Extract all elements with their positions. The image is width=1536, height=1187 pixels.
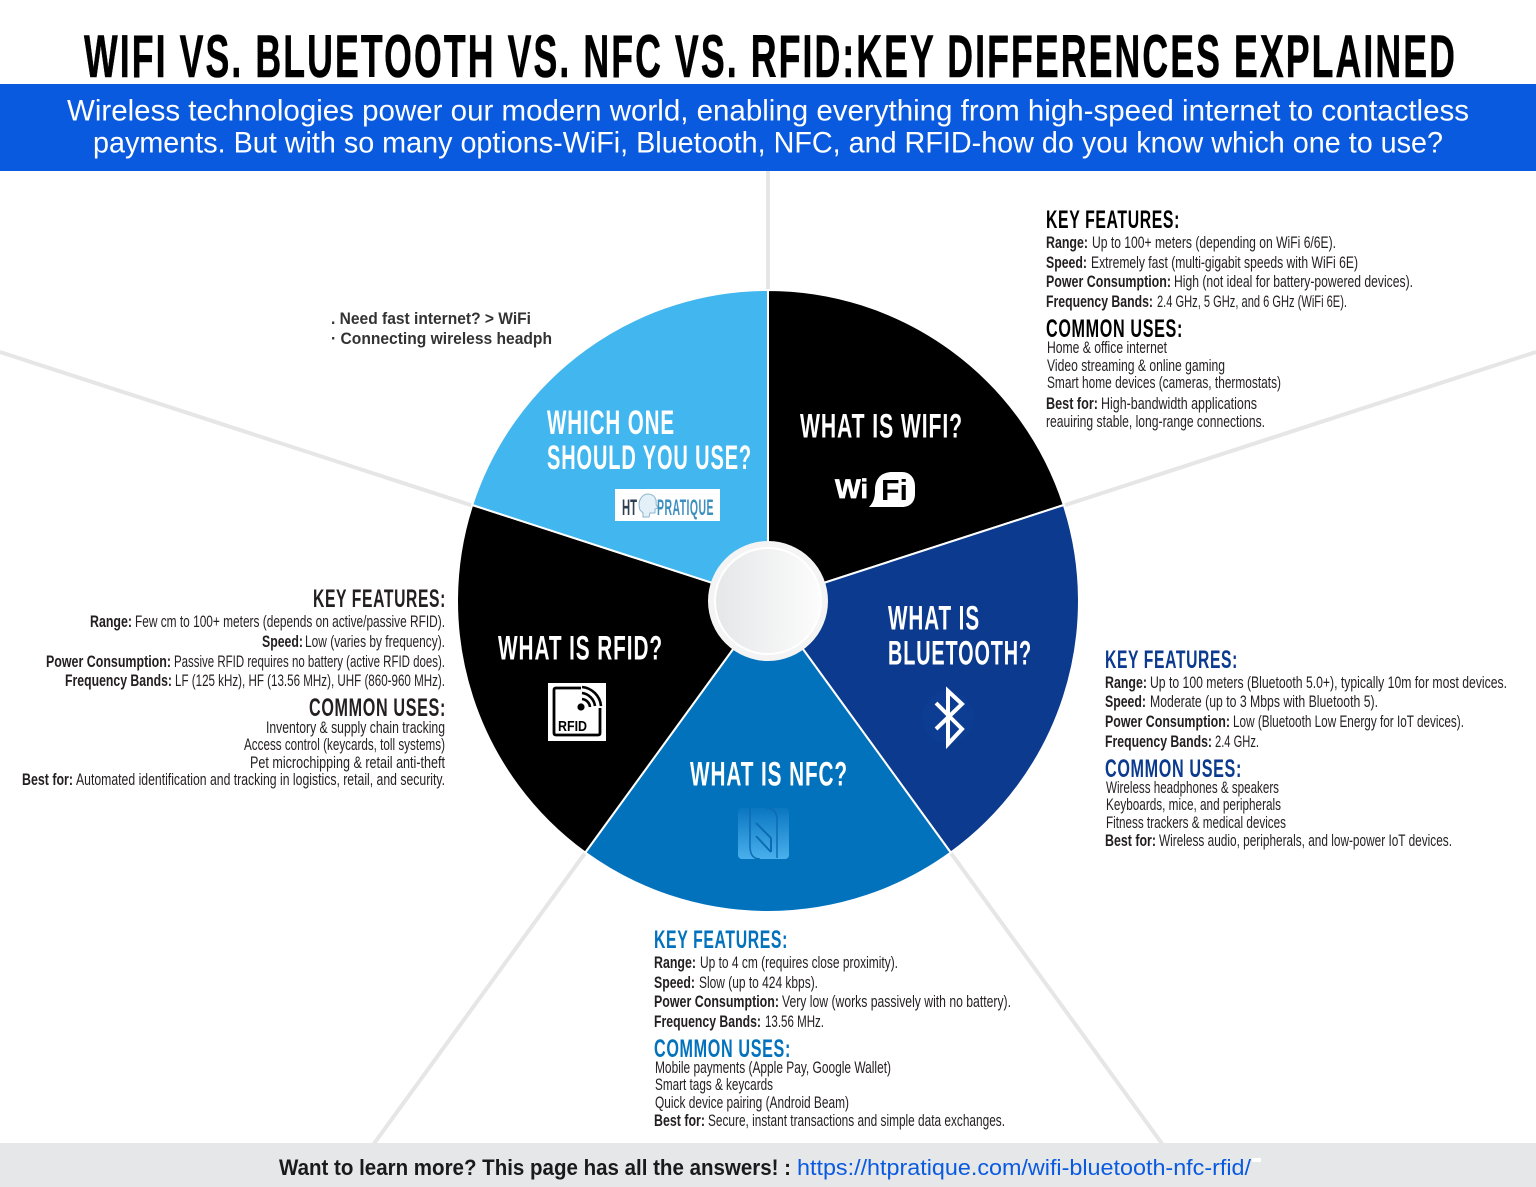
panel: wifi details: Video streaming & online gaming: [1047, 357, 1225, 375]
panel: wifi details: KEY FEATURES:: [1046, 206, 1180, 234]
wedge: rfid: [457, 505, 768, 853]
panel: nfc details: Quick device pairing (Android Beam): [655, 1094, 849, 1112]
text block: which one tips: [331, 310, 552, 348]
panel: rfid details: Range:: [90, 613, 132, 631]
panel: nfc details: Very low (works passively with no battery).: [782, 993, 1011, 1011]
subtitle banner: [0, 84, 1536, 171]
panel: bluetooth details: KEY FEATURES:: [1105, 646, 1238, 674]
icon: wifi logo: [835, 472, 915, 507]
footer bar: https://htpratique.com/wifi-bluetooth-nfc-rfid/: [797, 1155, 1252, 1180]
heading: what is wifi: WHAT IS WIFI?: [800, 408, 963, 446]
icon: wifi logo: Fi: [881, 475, 908, 507]
panel: rfid details: Automated identification and tracking in logistics, retail, and security.: [76, 771, 445, 789]
panel: rfid details: LF (125 kHz), HF (13.56 MHz), UHF (860-960 MHz).: [175, 672, 445, 690]
panel: wifi details: Smart home devices (cameras, thermostats): [1047, 374, 1281, 392]
text block: which one tips: . Need fast internet? > WiFi: [331, 310, 531, 328]
panel: bluetooth details: Range:: [1105, 674, 1147, 692]
panel: nfc details: Frequency Bands:: [654, 1013, 761, 1031]
panel: bluetooth details: Wireless headphones & speakers: [1106, 779, 1279, 797]
panel: bluetooth details: Speed:: [1105, 693, 1146, 711]
pie wheel: [457, 290, 1079, 912]
panel: nfc details: 13.56 MHz.: [765, 1013, 824, 1031]
panel: bluetooth details: Power Consumption:: [1105, 713, 1230, 731]
panel: wifi details: Range:: [1046, 234, 1088, 252]
panel: wifi details: 2.4 GHz, 5 GHz, and 6 GHz (WiFi 6E).: [1157, 293, 1347, 311]
panel: nfc details: Mobile payments (Apple Pay, Google Wallet): [655, 1059, 891, 1077]
panel: nfc details: Best for:: [654, 1112, 705, 1130]
logo: htpratique: HT: [622, 495, 637, 520]
panel: wifi details: Extremely fast (multi-gigabit speeds with WiFi 6E): [1091, 254, 1358, 272]
panel: wifi details: Home & office internet: [1047, 339, 1167, 357]
logo: htpratique: PRATIQUE: [657, 495, 714, 520]
icon: rfid: RFID: [558, 718, 587, 735]
panel: bluetooth details: Frequency Bands:: [1105, 733, 1212, 751]
panel: rfid details: Inventory & supply chain tracking: [266, 719, 445, 737]
heading: what is bluetooth: WHAT IS: [888, 600, 980, 638]
panel: nfc details: Speed:: [654, 974, 695, 992]
panel: rfid details: Power Consumption:: [46, 653, 171, 671]
panel: rfid details: Few cm to 100+ meters (depends on active/passive RFID).: [135, 613, 445, 631]
center hub: [708, 541, 828, 661]
wedge: nfc: [585, 601, 951, 912]
icon: nfc: [738, 808, 789, 859]
panel: rfid details: Frequency Bands:: [65, 672, 172, 690]
panel: rfid details: KEY FEATURES:: [313, 585, 446, 613]
panel: wifi details: High (not ideal for battery-powered devices).: [1174, 273, 1413, 291]
heading: what is bluetooth: [888, 600, 1032, 672]
panel: wifi details: Frequency Bands:: [1046, 293, 1153, 311]
subtitle banner: payments. But with so many options-WiFi, Bluetooth, NFC, and RFID-how do you know which one to use?: [93, 126, 1443, 160]
panel: nfc details: [654, 926, 1011, 1130]
panel: rfid details: Pet microchipping & retail anti-theft: [250, 754, 445, 772]
footer bar: Want to learn more? This page has all the answers! :: [279, 1155, 791, 1180]
icon: rfid: [548, 683, 606, 741]
panel: wifi details: Power Consumption:: [1046, 273, 1171, 291]
heading: what is rfid: WHAT IS RFID?: [498, 630, 663, 668]
panel: rfid details: Speed:: [262, 633, 303, 651]
panel: nfc details: Up to 4 cm (requires close proximity).: [700, 954, 898, 972]
wedge: bluetooth: [768, 505, 1079, 853]
subtitle banner: Wireless technologies power our modern world, enabling everything from high-speed internet to contactless: [67, 94, 1469, 128]
panel: bluetooth details: Best for:: [1105, 832, 1156, 850]
panel: nfc details: Secure, instant transactions and simple data exchanges.: [708, 1112, 1005, 1130]
heading: what is bluetooth: BLUETOOTH?: [888, 634, 1032, 672]
panel: nfc details: Power Consumption:: [654, 993, 779, 1011]
heading: which one: [547, 404, 752, 477]
panel: rfid details: [22, 585, 446, 789]
footer bar: [0, 1143, 1536, 1187]
panel: bluetooth details: [1105, 646, 1507, 850]
wedge: which one: [472, 290, 768, 601]
panel: wifi details: Up to 100+ meters (depending on WiFi 6/6E).: [1092, 234, 1336, 252]
panel: rfid details: Passive RFID requires no battery (active RFID does).: [174, 653, 445, 671]
logo: htpratique: [615, 489, 720, 521]
panel: rfid details: Access control (keycards, toll systems): [244, 736, 445, 754]
panel: bluetooth details: Moderate (up to 3 Mbps with Bluetooth 5).: [1150, 693, 1378, 711]
panel: wifi details: Speed:: [1046, 254, 1087, 272]
heading: which one: SHOULD YOU USE?: [547, 439, 752, 477]
heading: which one: WHICH ONE: [547, 404, 675, 442]
panel: nfc details: COMMON USES:: [654, 1035, 791, 1063]
panel: nfc details: KEY FEATURES:: [654, 926, 788, 954]
wedge: wifi: [768, 290, 1064, 601]
panel: rfid details: Best for:: [22, 771, 73, 789]
panel: bluetooth details: 2.4 GHz.: [1215, 733, 1259, 751]
panel: wifi details: COMMON USES:: [1046, 315, 1183, 343]
heading: what is nfc: WHAT IS NFC?: [690, 756, 848, 794]
text block: which one tips: · Connecting wireless headph: [331, 330, 552, 348]
panel: wifi details: [1046, 206, 1413, 431]
icon: bluetooth: [922, 691, 974, 744]
icon: wifi logo: Wi: [835, 474, 868, 504]
panel: bluetooth details: Keyboards, mice, and peripherals: [1106, 796, 1281, 814]
panel: wifi details: Best for:: [1046, 395, 1098, 413]
panel: nfc details: Smart tags & keycards: [655, 1076, 773, 1094]
panel: nfc details: Range:: [654, 954, 696, 972]
panel: bluetooth details: Fitness trackers & medical devices: [1106, 814, 1286, 832]
panel: bluetooth details: COMMON USES:: [1105, 755, 1242, 783]
panel: rfid details: COMMON USES:: [309, 694, 446, 722]
panel: nfc details: Slow (up to 424 kbps).: [699, 974, 818, 992]
panel: wifi details: reauiring stable, long-range connections.: [1046, 413, 1265, 431]
panel: wifi details: High-bandwidth applications: [1101, 395, 1257, 413]
panel: rfid details: Low (varies by frequency).: [305, 633, 445, 651]
